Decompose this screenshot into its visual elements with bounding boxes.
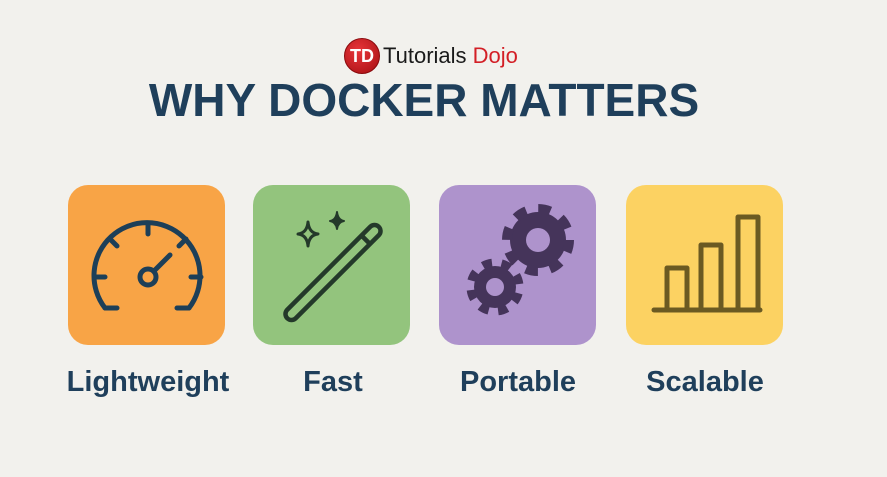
label: portable: Portable xyxy=(460,366,576,398)
icon: magic wand xyxy=(283,211,383,322)
icon: TD badge: TD xyxy=(350,46,374,66)
icon: TD badge xyxy=(344,38,380,74)
panel: fast xyxy=(253,185,410,345)
label: lightweight: Lightweight xyxy=(67,366,229,398)
label: scalable: Scalable xyxy=(646,366,764,398)
icon: gauge xyxy=(92,220,204,310)
logo xyxy=(344,38,518,74)
panel: scalable xyxy=(626,185,783,345)
panel: portable xyxy=(439,185,596,345)
title: WHY DOCKER MATTERS xyxy=(149,74,699,126)
icon: bar chart xyxy=(652,214,762,312)
label: fast: Fast xyxy=(303,366,363,398)
logo text: Tutorials Dojo xyxy=(383,43,518,68)
panel: lightweight xyxy=(68,185,225,345)
icon: gears xyxy=(466,204,574,316)
